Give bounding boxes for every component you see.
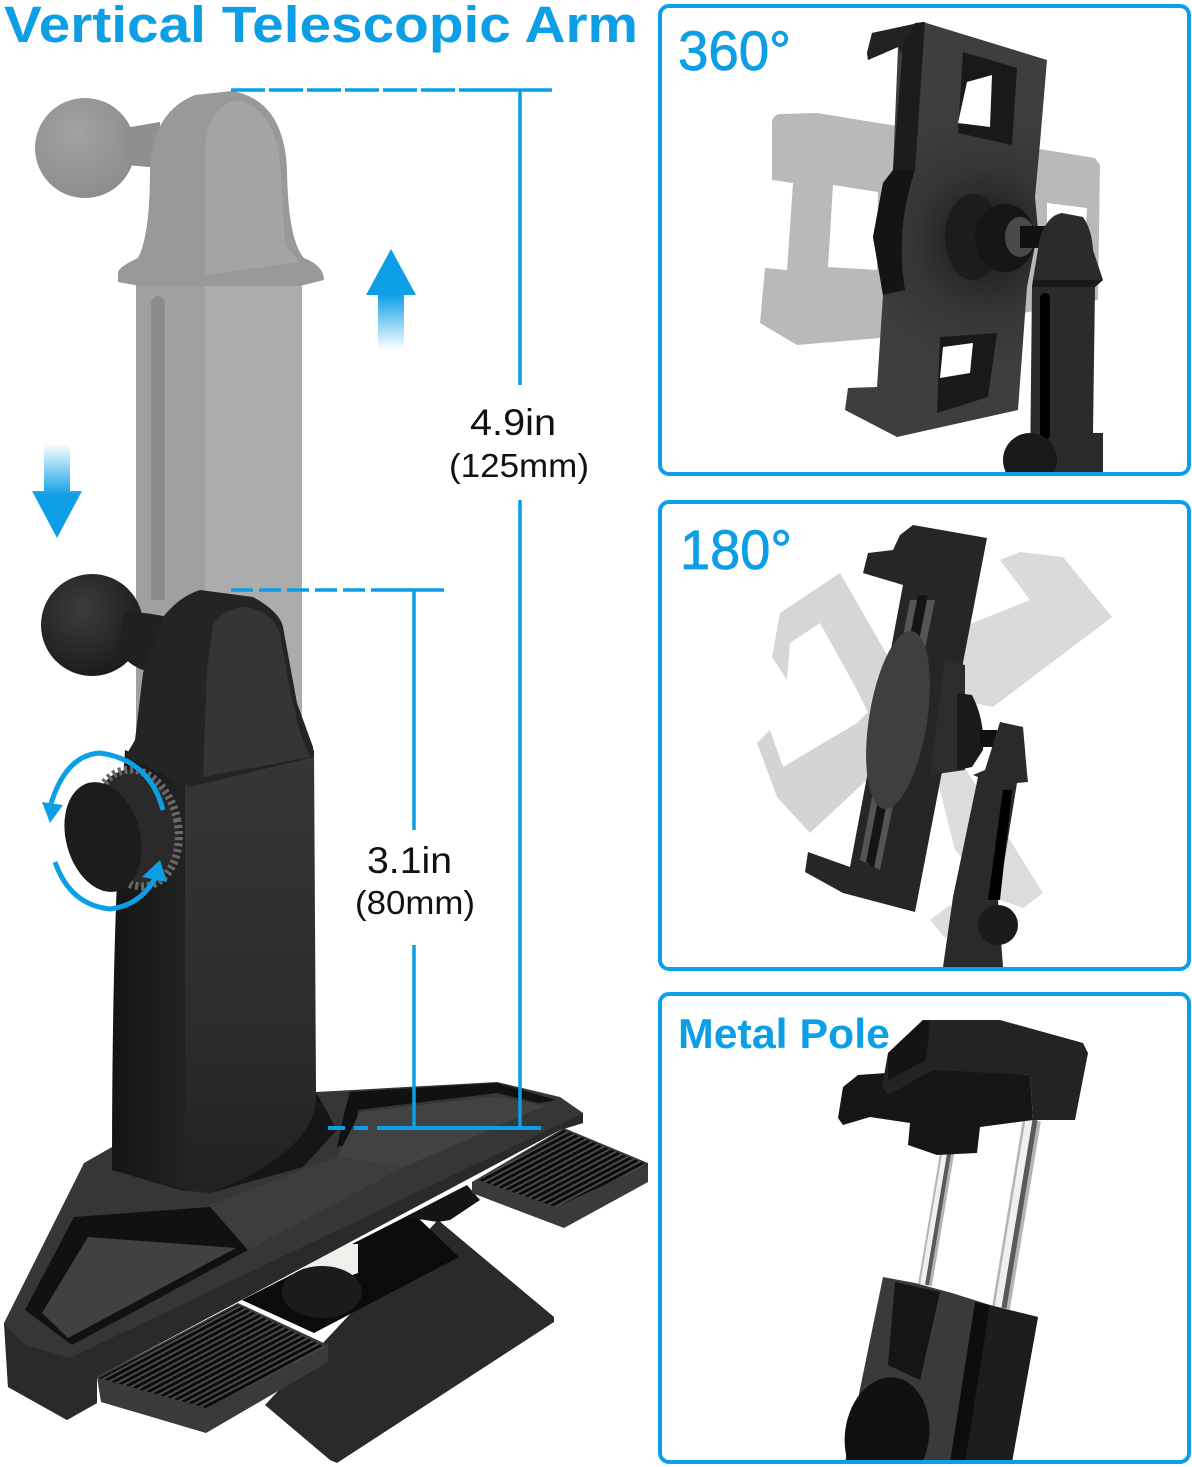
top surface highlight bbox=[337, 1096, 545, 1167]
lower body bbox=[837, 1277, 1038, 1467]
bolt nut bbox=[945, 194, 992, 280]
black clamp bbox=[845, 22, 1103, 487]
gray extended arm bbox=[35, 91, 324, 730]
ghost clamps bbox=[757, 525, 1112, 967]
left recess outline bbox=[25, 1207, 248, 1345]
base body bbox=[4, 1082, 583, 1420]
black arm bbox=[41, 574, 337, 1193]
dimension 4.9in: (125mm) bbox=[449, 447, 589, 484]
heading: metal pole: Metal Pole bbox=[678, 1010, 890, 1057]
top jaw bbox=[867, 22, 923, 60]
shaft collar foot bbox=[112, 1092, 337, 1193]
centre wedge bbox=[210, 1157, 404, 1250]
dome side bbox=[125, 590, 314, 787]
dimension 3.1in: (80mm) bbox=[355, 884, 475, 921]
lower clip plate bbox=[265, 1220, 554, 1463]
panel: metal pole bbox=[660, 994, 1189, 1467]
front rim bbox=[4, 1113, 583, 1420]
stand bbox=[1030, 213, 1103, 474]
rear jaw bbox=[838, 1068, 1033, 1155]
right grip bbox=[472, 1128, 648, 1228]
base and clip bbox=[4, 1082, 648, 1463]
bottom window bbox=[937, 333, 997, 413]
up arrow bbox=[366, 249, 416, 350]
stand bbox=[943, 722, 1028, 967]
front jaw bbox=[882, 1020, 1088, 1120]
tray recess bbox=[337, 1083, 556, 1147]
panel: 180 rotation bbox=[660, 502, 1189, 969]
shaft front bbox=[185, 750, 316, 1193]
dimension 3.1in: 3.1in bbox=[367, 840, 452, 881]
knob with rotation arrows bbox=[42, 753, 189, 909]
dome face bbox=[203, 607, 310, 777]
top window bbox=[958, 52, 1017, 145]
shaft side bbox=[112, 750, 190, 1190]
panel: 360 rotation bbox=[660, 6, 1189, 487]
down arrow bbox=[32, 444, 82, 538]
dimension 4.9in: 4.9in bbox=[470, 402, 556, 443]
dimension 4.9in bbox=[231, 90, 589, 1128]
left recess panel bbox=[42, 1237, 236, 1338]
left grip bbox=[97, 1303, 328, 1433]
screw and spring bbox=[282, 1244, 362, 1318]
nut bbox=[957, 693, 983, 770]
ghost right window bbox=[1047, 203, 1087, 240]
heading: 180: 180° bbox=[680, 518, 792, 581]
ball joint bbox=[41, 574, 143, 676]
dimension 3.1in bbox=[231, 590, 541, 1128]
dark edge bands bbox=[893, 22, 925, 170]
metal poles bbox=[923, 1120, 1035, 1308]
heading: 360: 360° bbox=[678, 19, 791, 82]
ghost clamp bbox=[760, 113, 1100, 345]
black clamp bbox=[805, 525, 987, 912]
